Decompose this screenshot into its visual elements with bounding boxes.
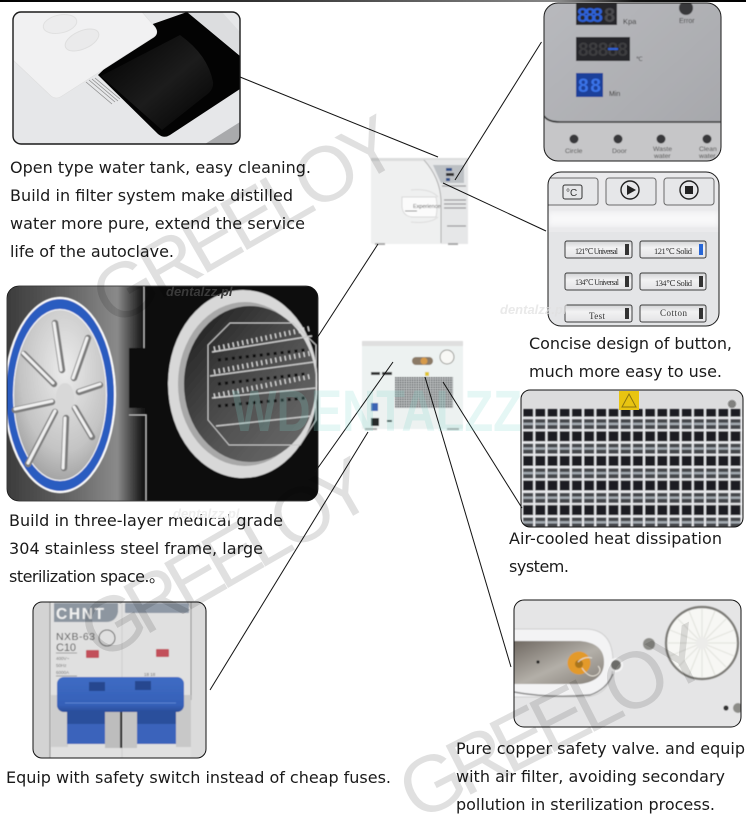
small dentalzz watermarks (166, 284, 567, 521)
panel: display close-up: 8 (604, 5, 615, 27)
panel: button close-up: Cotton (660, 308, 688, 318)
CHNT label (54, 603, 118, 622)
blue toggle (57, 677, 184, 712)
panel: button close-up: 121℃ Solid (654, 246, 693, 256)
panel: stainless steel chamber photo (4, 286, 318, 501)
filter slots (86, 78, 120, 104)
text: chamber: Build in three-layer medical grade (9, 511, 283, 530)
panel border: chamber (7, 286, 318, 501)
panel: display close-up: Kpa (623, 17, 637, 26)
panel: display close-up (544, 1, 721, 161)
panel: display close-up: Circle (565, 148, 583, 155)
panel: safety switch photo: CHNT (56, 606, 105, 623)
top buttons (540, 178, 714, 205)
text: water tank: water more pure, extend the service (10, 214, 305, 233)
air filter (666, 607, 738, 679)
text: valve: with air filter, avoiding secondary (456, 767, 725, 786)
panel: display close-up: Door (612, 148, 627, 155)
text: valve: Pure copper safety valve. and equip (456, 739, 745, 758)
text: chamber (9, 511, 283, 586)
top border line (0, 0, 746, 2)
door spokes (15, 323, 100, 468)
text: grille: Air-cooled heat dissipation (509, 529, 722, 548)
watermark: GREELOY top: GREELOY (76, 98, 413, 343)
small dentalzz watermarks: dentalzz.pl (173, 506, 240, 521)
panel: open water tank photo (13, 12, 240, 144)
text: chamber: sterilization space.。 (9, 567, 165, 586)
door handle (402, 197, 437, 217)
panel: safety switch photo: 6000A (56, 670, 69, 675)
panel: safety switch photo: 50Hz (56, 663, 67, 668)
text: valve (456, 739, 745, 814)
teal overlay watermark: WDENTALZZ (232, 379, 522, 444)
panel: button close-up: 134℃ Solid (655, 278, 693, 288)
panel: air-cooled grille photo (521, 390, 743, 527)
switch pillars (51, 695, 68, 747)
text: water tank (10, 158, 311, 261)
panel: safety switch photo (33, 602, 206, 758)
text: buttons: much more easy to use. (529, 362, 722, 381)
panel: display close-up: Waste (653, 146, 672, 153)
panel: safety switch photo: C10 (56, 642, 76, 654)
panel: display close-up: 88 (578, 76, 601, 97)
panel: display close-up: 888 (577, 5, 603, 27)
panel: display close-up: Clean (699, 146, 717, 153)
autoclave rear view (362, 341, 463, 430)
chamber ring (168, 290, 318, 478)
panel: button close-up: Test (589, 311, 605, 321)
panel: safety switch photo: 400V~ (56, 656, 70, 661)
small dentalzz watermarks: dentalzz.pl (166, 284, 233, 299)
copper valve (568, 652, 590, 674)
panel: button close-up: °C (566, 188, 577, 199)
tank opening (98, 12, 240, 137)
panel: button close-up (540, 172, 719, 326)
panel: display close-up: water (653, 153, 671, 160)
panel border: switch (33, 602, 206, 758)
program buttons (565, 241, 706, 322)
chamber shelves (208, 323, 316, 445)
panel: display close-up: Min (609, 91, 620, 98)
panel: safety switch photo: NXB-63 (56, 631, 95, 643)
valve recess (514, 628, 614, 698)
text: water tank: Open type water tank, easy cleaning. (10, 158, 311, 177)
text: buttons: Concise design of button, (529, 334, 732, 353)
panel: display close-up: 88888 (578, 40, 628, 61)
text: grille (509, 529, 722, 576)
autoclave front view: Experience (413, 204, 441, 210)
control panel (433, 165, 464, 183)
panel border: water tank (13, 12, 240, 144)
blue door gasket and disc (4, 297, 116, 493)
connector lines (210, 42, 546, 690)
text: safety switch: Equip with safety switch instead of cheap fuses. (6, 768, 391, 787)
panel: safety valve photo (500, 600, 743, 727)
small dentalzz watermarks: dentalzz.pl (500, 302, 567, 317)
text: grille: system. (509, 557, 569, 576)
panel: display close-up: water (698, 153, 716, 160)
panel: button close-up: 134℃ Universal (575, 278, 620, 287)
text: valve: pollution in sterilization process. (456, 795, 715, 814)
tank lid (13, 12, 157, 98)
panel: button close-up: 121℃ Universal (575, 247, 619, 256)
panel: display close-up: Error (679, 18, 695, 25)
autoclave front view (371, 158, 468, 245)
text: water tank: life of the autoclave. (10, 242, 174, 261)
warning label (619, 391, 639, 410)
watermark: GREELOY middle: GREELOY (64, 440, 387, 677)
panel: safety switch photo: 18 18 (144, 672, 156, 677)
text: water tank: Build in filter system make distilled (10, 186, 293, 205)
panel border: display (544, 3, 721, 161)
panel: display close-up: ℃ (636, 57, 643, 63)
panel border: valve (514, 600, 741, 727)
text: buttons (529, 334, 732, 381)
panel border: buttons (548, 172, 719, 326)
panel border: grille (521, 390, 743, 527)
text: chamber: 304 stainless steel frame, large (9, 539, 263, 558)
